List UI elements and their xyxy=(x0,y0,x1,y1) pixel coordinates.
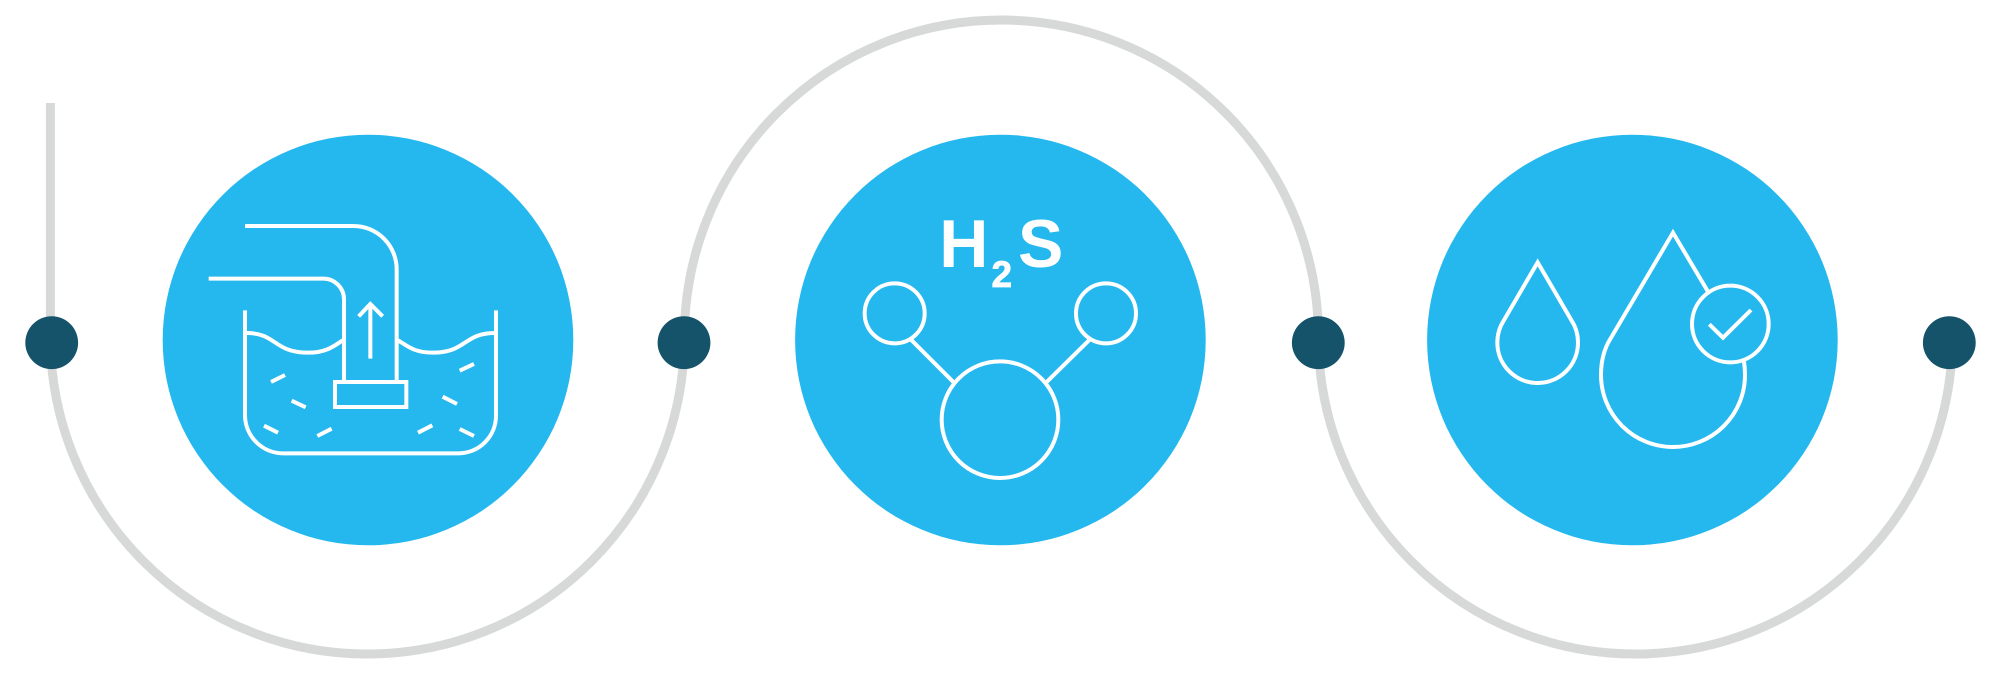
panel: pumping from tank xyxy=(163,135,573,545)
panel: clean water xyxy=(1427,135,1838,545)
blue circle background xyxy=(163,135,573,545)
icon: pump in tank xyxy=(209,226,496,453)
timeline node 1 xyxy=(25,316,78,369)
H2S label: S xyxy=(1018,206,1063,282)
timeline node 3 xyxy=(1292,316,1345,369)
timeline node 2 xyxy=(658,316,710,369)
panel: hydrogen sulfide xyxy=(795,135,1206,545)
H2S label: 2 xyxy=(992,254,1012,295)
blue circle background xyxy=(795,135,1206,545)
icon: H2S molecule xyxy=(865,283,1136,478)
timeline node 4 xyxy=(1923,316,1976,369)
blue circle background xyxy=(1427,135,1838,545)
H2S label: H xyxy=(939,206,988,282)
icon: water drops with check xyxy=(1497,233,1769,447)
